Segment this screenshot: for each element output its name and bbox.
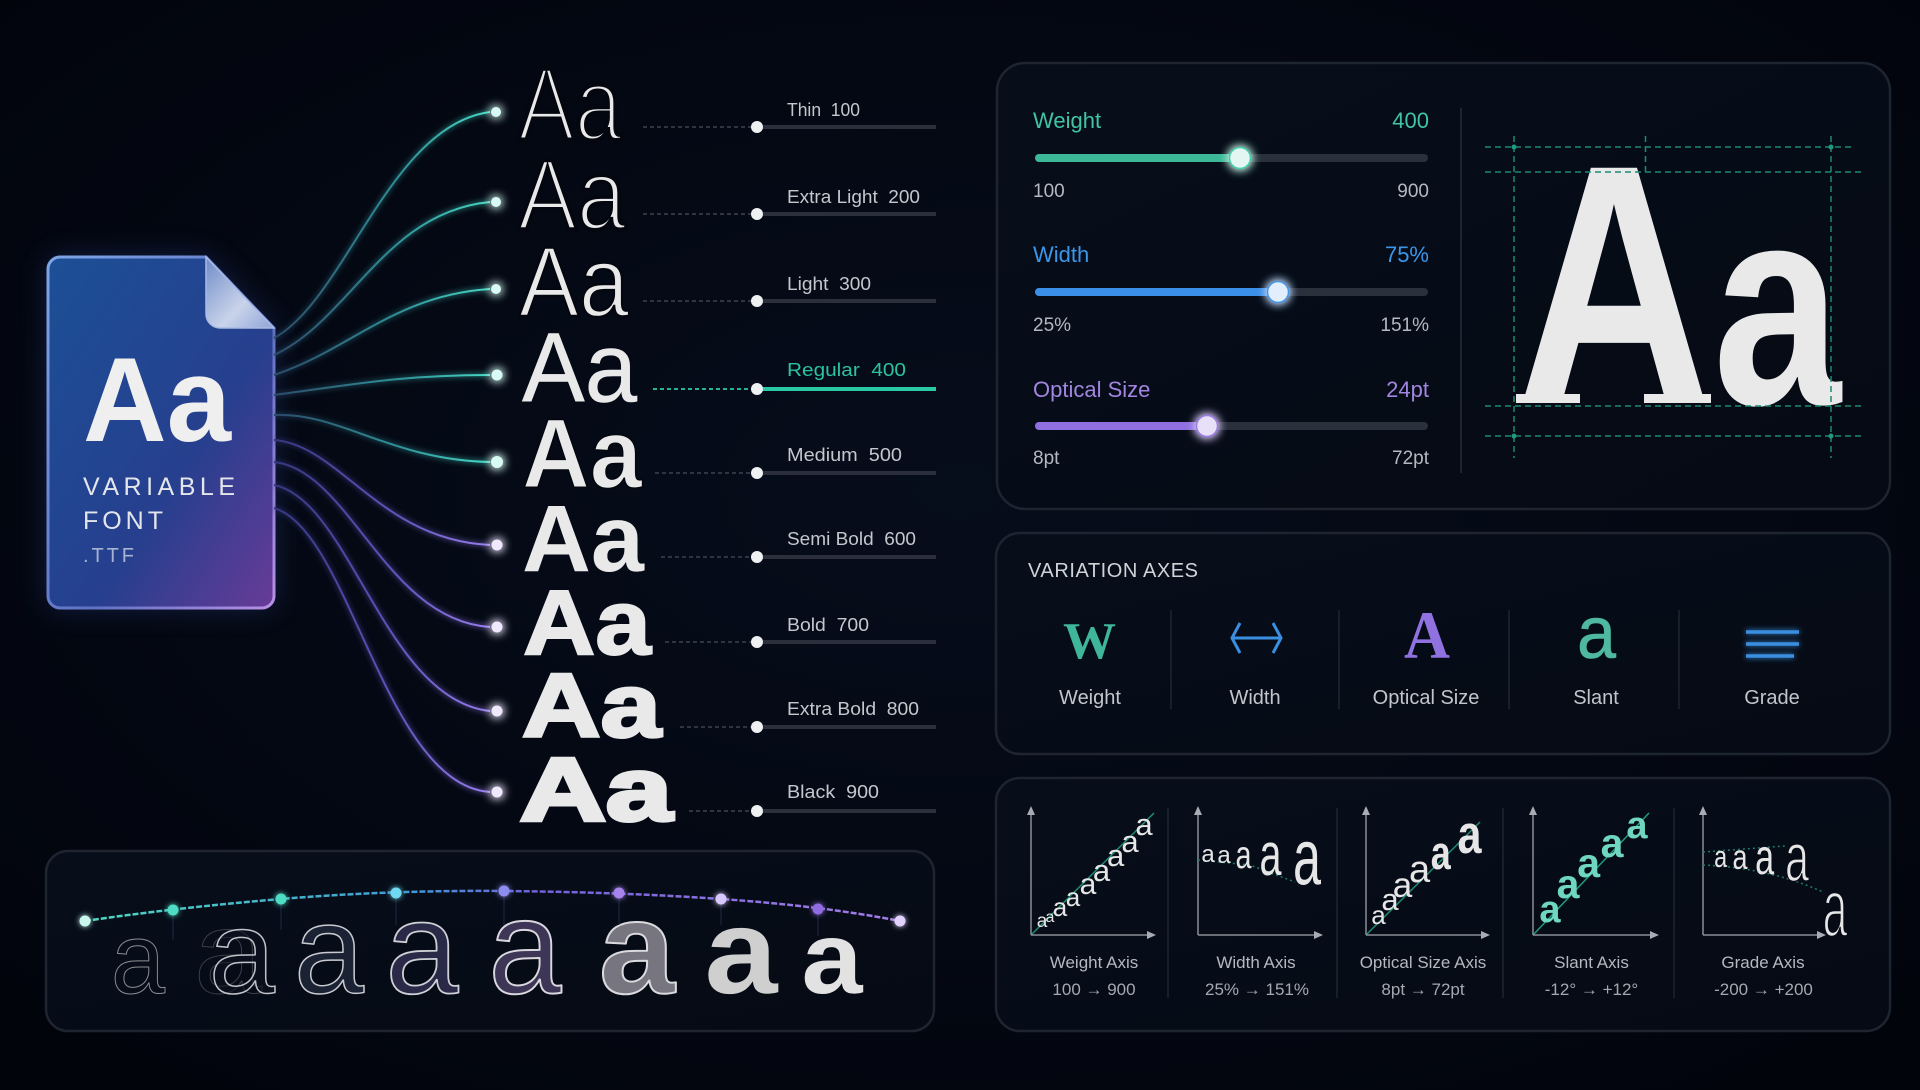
axis: optical size: Optical Size bbox=[1373, 687, 1479, 709]
chart: slant axis: a bbox=[1626, 805, 1648, 847]
file icon: variable font: .TTF bbox=[83, 545, 134, 567]
interpolation glyphs: a bbox=[194, 887, 262, 1019]
interpolation glyphs: a bbox=[209, 887, 275, 1019]
chart: optical size axis: a bbox=[1381, 882, 1399, 917]
slider: width bbox=[1033, 242, 1429, 336]
chart: weight axis: a bbox=[1046, 909, 1055, 926]
file icon: variable font: VARIABLE bbox=[83, 473, 235, 501]
chart: grade axis: -200 → +200 bbox=[1714, 980, 1813, 999]
chart: weight axis: a bbox=[1093, 853, 1111, 888]
chart: grade axis: a bbox=[1785, 819, 1809, 896]
chart: slant axis: a bbox=[1539, 889, 1561, 931]
chart: weight axis: a bbox=[1066, 882, 1081, 912]
weight specimen column: Aa bbox=[518, 139, 626, 251]
interpolation glyphs: a bbox=[111, 903, 165, 1015]
slider: optical size bbox=[1033, 377, 1430, 469]
chart: slant axis: Slant Axis bbox=[1554, 953, 1629, 972]
slider: optical size: Optical Size bbox=[1033, 377, 1150, 402]
heading: VARIATION AXES bbox=[1028, 560, 1198, 582]
interpolation glyphs: a bbox=[488, 873, 562, 1022]
weight specimen column: Aa bbox=[520, 739, 674, 839]
weight specimen column: Aa bbox=[522, 656, 662, 756]
slider: optical size: 8pt bbox=[1033, 448, 1060, 469]
chart: slant axis bbox=[1529, 805, 1659, 999]
axis: weight: Weight bbox=[1059, 687, 1121, 709]
axis: slant bbox=[1573, 591, 1619, 709]
weight specimen column: Aa bbox=[518, 47, 622, 163]
chart: slant axis: a bbox=[1577, 840, 1601, 886]
weight scale rows: Black 900 bbox=[787, 782, 879, 802]
chart: width axis bbox=[1194, 806, 1323, 999]
chart: grade axis: a bbox=[1822, 863, 1848, 954]
axis: weight: W bbox=[1063, 613, 1116, 670]
chart: width axis: a bbox=[1293, 812, 1321, 901]
chart: weight axis: a bbox=[1135, 807, 1153, 842]
specimen Aa with guides bbox=[1485, 94, 1861, 476]
axis: optical size bbox=[1373, 597, 1479, 709]
specimen Aa with guides: a bbox=[1713, 147, 1842, 465]
chart: optical size axis: a bbox=[1371, 900, 1386, 930]
slider: weight bbox=[1033, 108, 1429, 202]
chart: grade axis bbox=[1699, 806, 1848, 999]
chart: grade axis: Grade Axis bbox=[1721, 953, 1805, 972]
weight specimen column: Aa bbox=[522, 312, 637, 422]
axis: grade: Grade bbox=[1744, 687, 1800, 709]
axis: width: Width bbox=[1229, 687, 1281, 709]
slider: optical size: 24pt bbox=[1386, 377, 1429, 402]
weight specimen column: Aa bbox=[522, 399, 643, 509]
slider: optical size: 72pt bbox=[1392, 448, 1430, 469]
chart: weight axis: 100 → 900 bbox=[1052, 980, 1136, 999]
axis: optical size: A bbox=[1404, 597, 1450, 673]
chart: grade axis: a bbox=[1755, 829, 1774, 885]
axis: width bbox=[1229, 623, 1281, 709]
chart: width axis: a bbox=[1236, 834, 1252, 877]
interpolation glyphs: a bbox=[294, 881, 364, 1020]
interpolation glyphs: a bbox=[704, 883, 779, 1019]
chart: optical size axis: a bbox=[1393, 866, 1413, 905]
axis: grade bbox=[1744, 632, 1800, 709]
weight scale rows: Medium 500 bbox=[787, 445, 902, 465]
chart: grade axis: a bbox=[1714, 839, 1728, 874]
chart: weight axis: Weight Axis bbox=[1050, 953, 1138, 972]
chart: optical size axis: a bbox=[1431, 826, 1451, 879]
panel: axis charts bbox=[996, 778, 1890, 1031]
axis: weight bbox=[1059, 613, 1121, 709]
file icon: variable font bbox=[48, 257, 274, 608]
file icon: variable font: Aa bbox=[83, 333, 232, 467]
chart: weight axis bbox=[1027, 806, 1156, 999]
chart: optical size axis: 8pt → 72pt bbox=[1381, 980, 1465, 999]
slider: weight: 400 bbox=[1392, 108, 1429, 133]
interpolation curve bbox=[80, 886, 906, 940]
axis: slant: a bbox=[1577, 591, 1617, 674]
connector end nodes bbox=[491, 107, 503, 798]
chart: weight axis: a bbox=[1107, 838, 1125, 873]
slider: width: 25% bbox=[1033, 315, 1071, 336]
slider: weight: Weight bbox=[1033, 108, 1101, 133]
chart: width axis: a bbox=[1260, 821, 1282, 888]
weight scale rows: Bold 700 bbox=[787, 615, 869, 635]
slider: width: 75% bbox=[1385, 242, 1429, 267]
slider: weight: 100 bbox=[1033, 181, 1065, 202]
chart: grade axis: a bbox=[1732, 838, 1748, 877]
interpolation glyphs bbox=[111, 873, 864, 1022]
chart: slant axis: a bbox=[1557, 861, 1581, 907]
weight scale rows: Semi Bold 600 bbox=[787, 529, 916, 549]
panel: weight interpolation strip bbox=[46, 851, 934, 1031]
weight specimen column: Aa bbox=[523, 572, 652, 674]
specimen Aa with guides: A bbox=[1516, 94, 1712, 476]
weight specimen column bbox=[518, 47, 674, 839]
connector curves from file to weights bbox=[274, 112, 490, 792]
panel: variation axes bbox=[996, 533, 1890, 754]
file icon: variable font: FONT bbox=[83, 507, 163, 535]
chart: optical size axis bbox=[1360, 803, 1490, 999]
chart: weight axis: a bbox=[1121, 824, 1139, 859]
chart: slant axis: -12° → +12° bbox=[1545, 980, 1638, 999]
weight scale rows bbox=[643, 100, 936, 817]
panel: axis sliders and specimen bbox=[997, 63, 1890, 509]
interpolation glyphs: a bbox=[599, 874, 677, 1021]
chart: weight axis: a bbox=[1080, 868, 1097, 901]
weight scale rows: Regular 400 bbox=[787, 360, 906, 380]
chart: width axis: a bbox=[1217, 842, 1231, 869]
chart: width axis: a bbox=[1201, 841, 1215, 868]
chart: slant axis: a bbox=[1601, 820, 1625, 866]
chart: optical size axis: a bbox=[1409, 849, 1431, 891]
chart: width axis: 25% → 151% bbox=[1205, 980, 1309, 999]
weight scale rows: Extra Light 200 bbox=[787, 187, 920, 207]
chart: weight axis: a bbox=[1053, 892, 1068, 922]
slider: width: Width bbox=[1033, 242, 1089, 267]
chart: optical size axis: a bbox=[1458, 803, 1482, 865]
weight scale rows: Thin 100 bbox=[787, 100, 860, 120]
slider: weight: 900 bbox=[1397, 181, 1429, 202]
weight specimen column: Aa bbox=[519, 226, 630, 337]
chart: optical size axis: Optical Size Axis bbox=[1360, 953, 1486, 972]
slider: width: 151% bbox=[1380, 315, 1429, 336]
weight specimen column: Aa bbox=[522, 486, 645, 592]
interpolation glyphs: a bbox=[802, 901, 864, 1015]
interpolation glyphs: a bbox=[386, 874, 459, 1021]
axis: slant: Slant bbox=[1573, 687, 1619, 709]
weight scale rows: Extra Bold 800 bbox=[787, 699, 919, 719]
weight scale rows: Light 300 bbox=[787, 274, 871, 294]
chart: weight axis: a bbox=[1037, 911, 1048, 932]
chart: width axis: Width Axis bbox=[1216, 953, 1296, 972]
